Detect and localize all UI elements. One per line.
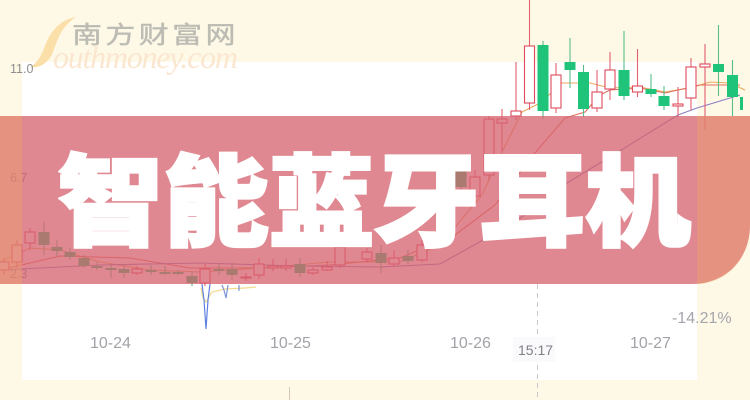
band side tints (0, 116, 750, 284)
y axis labels: 2.3 (10, 267, 27, 281)
x axis date labels: 10-26 (450, 335, 491, 352)
moving average lines (0, 82, 745, 272)
time tooltip: 15:17 (518, 342, 553, 358)
logo: southmoney watermark (30, 17, 239, 75)
x axis date labels (90, 335, 671, 352)
indicator spike lines (201, 284, 256, 329)
y axis labels: 6.7 (10, 171, 27, 185)
logo: southmoney watermark: 南方财富网 (72, 21, 239, 48)
x axis date labels: 10-25 (270, 335, 311, 352)
y axis labels (10, 62, 33, 281)
pink title band (0, 116, 750, 284)
percent label: -14.21% (672, 310, 732, 327)
crosshair dashed line (536, 284, 538, 400)
chart background panel (22, 62, 697, 380)
x axis date labels: 10-24 (90, 335, 131, 352)
bottom tick (288, 387, 290, 400)
time tooltip (513, 337, 555, 362)
x axis date labels: 10-27 (630, 335, 671, 352)
title: 智能蓝牙耳机 (58, 124, 691, 266)
candlesticks: rising (0, 0, 710, 286)
logo: southmoney watermark: outhmoney.com (53, 39, 238, 75)
y axis labels: 11.0 (10, 62, 33, 76)
candlesticks: falling (38, 25, 743, 286)
